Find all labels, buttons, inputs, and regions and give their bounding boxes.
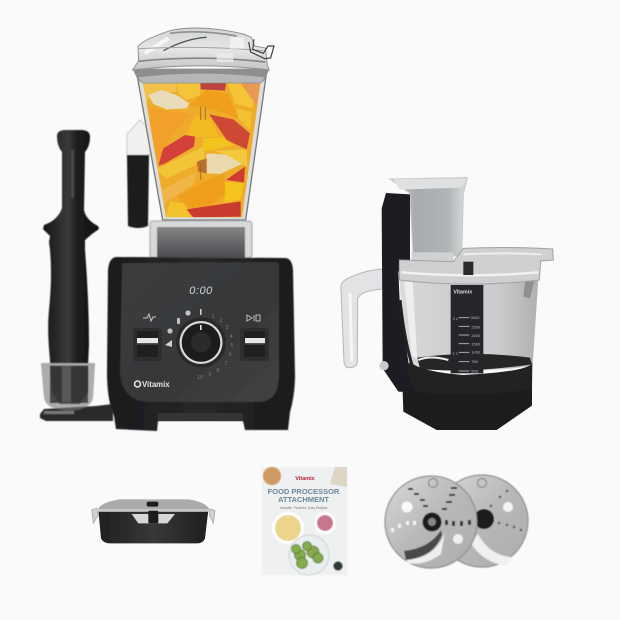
jar body — [137, 77, 266, 220]
dial markings: 2 — [219, 318, 223, 324]
pulse icon — [143, 314, 156, 321]
recipe book: Versatile, Powerful, Easy Recipes — [280, 506, 328, 510]
dial markings: 1 — [211, 314, 215, 320]
dial markings: 7 — [224, 361, 228, 367]
bowl — [399, 278, 538, 372]
control panel — [120, 262, 279, 402]
dial markings: 8 — [216, 368, 220, 374]
tamper cup — [41, 363, 95, 411]
product scene — [39, 28, 554, 576]
jar shoulder — [133, 69, 269, 83]
processor handle — [341, 269, 385, 368]
dial markings — [165, 309, 234, 381]
dial markings: 5 — [230, 343, 234, 349]
dial markings: 4 — [229, 334, 233, 340]
feed chute — [390, 178, 467, 262]
dial markings: 6 — [228, 352, 232, 358]
disc back — [436, 475, 528, 567]
container body — [98, 510, 208, 543]
measurement strip: 2000 — [471, 333, 481, 338]
container lid — [98, 499, 209, 512]
motor base — [107, 257, 295, 431]
jar and fruit, drawn in enlarged coordinates — [133, 28, 274, 220]
measurement strip: 1500 — [471, 342, 481, 347]
lid — [133, 28, 274, 70]
disc front — [385, 476, 477, 568]
fruit — [140, 78, 263, 220]
measurement strip: 750 — [471, 359, 479, 364]
blender group — [40, 28, 295, 431]
measurement strip: 1 L — [453, 350, 459, 355]
book title — [268, 487, 340, 504]
book cover — [262, 467, 347, 575]
container handle — [132, 514, 175, 523]
slicing discs — [385, 475, 528, 568]
food processor — [341, 178, 553, 430]
Vitamix logo: Vitamix — [142, 380, 170, 389]
right switch — [240, 328, 269, 361]
blender neck — [150, 221, 252, 258]
recipe book — [262, 467, 347, 575]
measurement strip: 1000 — [471, 350, 481, 355]
book food photos — [272, 512, 342, 575]
dial — [176, 318, 226, 368]
processor base — [403, 389, 532, 430]
dial markings: 9 — [208, 372, 212, 378]
tamper holder tray — [40, 404, 113, 421]
book title: FOOD PROCESSOR — [268, 487, 340, 496]
measurement strip — [451, 285, 483, 373]
measurement strip: 500 — [471, 368, 479, 373]
timer display: 0:00 — [189, 285, 213, 297]
play stop icon — [247, 315, 260, 321]
measurement strip: 3 L — [453, 316, 459, 321]
dial markings: 10 — [197, 375, 203, 381]
book title: ATTACHMENT — [278, 495, 329, 504]
measurement strip: Vitamix — [453, 289, 472, 295]
measurement strip: 3000 — [471, 315, 480, 320]
storage container — [92, 499, 215, 543]
bowl collar — [407, 362, 532, 394]
bowl lid — [399, 247, 553, 284]
tamper — [43, 130, 99, 404]
left switch — [133, 328, 162, 361]
jar handle — [127, 120, 150, 228]
dial markings: 3 — [225, 325, 229, 331]
measurement strip: 2500 — [471, 324, 481, 329]
latch — [379, 361, 389, 370]
book logo: Vitamix — [295, 476, 316, 482]
processor spine — [382, 193, 416, 392]
